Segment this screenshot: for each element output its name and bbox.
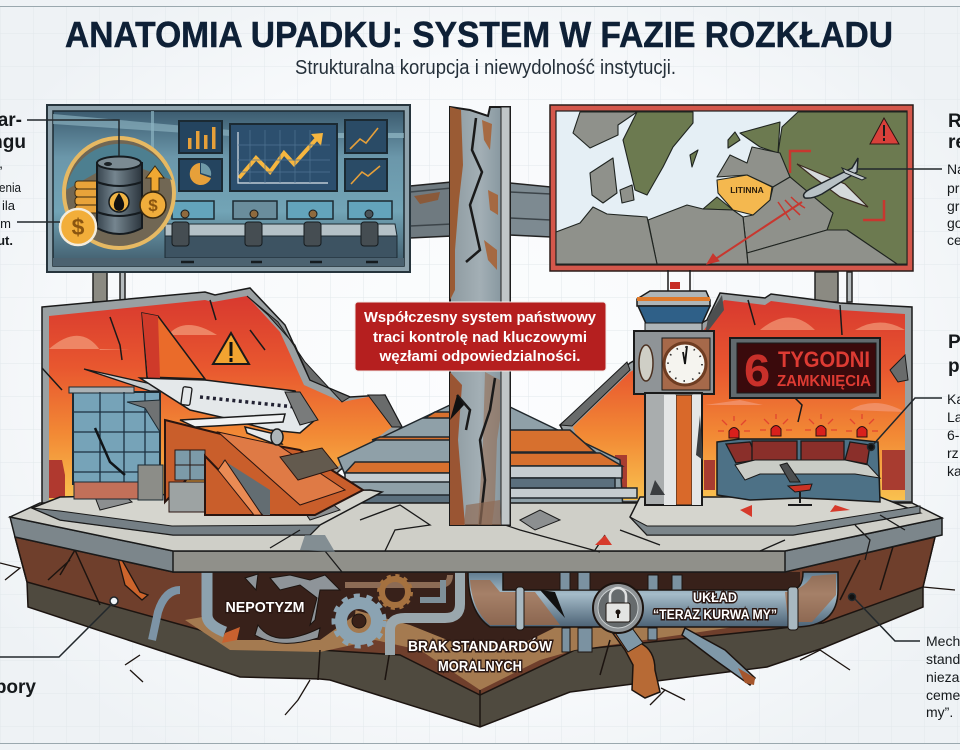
- crashed airplane: [84, 313, 318, 445]
- cropped text: right middle callout: [947, 332, 960, 479]
- cropped text: right bottom callout: ceme: [926, 687, 960, 703]
- label: lack of moral standards: BRAK STANDARDÓW: [408, 637, 553, 655]
- callout: red statement box: traci kontrolę nad kluczowymi: [373, 329, 587, 346]
- label: lack of moral standards: [408, 637, 553, 675]
- callout: red statement box: Współczesny system państwowy: [364, 309, 597, 326]
- central terminal roof: [338, 405, 637, 510]
- operators at desks: [53, 201, 404, 266]
- board text: TYGODNI: [778, 347, 870, 372]
- seven segment digit 6: 6: [743, 348, 771, 401]
- collapsed orange building: [165, 420, 363, 515]
- icon: oil barrel with coins: [60, 138, 174, 248]
- cropped text: right middle callout: 6-: [947, 427, 960, 443]
- panel: right ruined wall with sky: [560, 293, 912, 502]
- cropped text: left top callout: [0, 110, 26, 248]
- label: nepotism: NEPOTYZM: [226, 599, 304, 616]
- subtitle: Strukturalna korupcja i niewydolność instytucji.: [295, 57, 676, 79]
- emergency control console: [717, 414, 880, 505]
- callout: red statement box: węzłami odpowiedzialności.: [378, 348, 580, 365]
- main corruption pipeline: [468, 572, 838, 698]
- concrete platform slab: [10, 490, 942, 572]
- foundation: soil and bedrock: [0, 537, 955, 727]
- cropped text: right bottom callout: stand: [926, 651, 960, 667]
- label: pipeline system: UKŁAD: [693, 590, 737, 605]
- icon: steel gear: [334, 596, 384, 646]
- panel: LED closure countdown board: [730, 338, 880, 401]
- cropped text: right bottom callout: Mech: [926, 633, 960, 649]
- label: pipeline system: [653, 590, 777, 622]
- cropped text: right bottom callout: nieza: [926, 669, 960, 685]
- central rusty column: [450, 107, 510, 525]
- title: ANATOMIA UPADKU: SYSTEM W FAZIE ROZKŁADU: [65, 14, 893, 55]
- map: Lithuania highlight: LITINNA: [730, 185, 764, 195]
- icon: oil barrel with coins: $: [148, 196, 158, 215]
- icon: bronze gear: [379, 576, 411, 608]
- label: lack of moral standards: MORALNYCH: [438, 658, 522, 675]
- board text: [777, 347, 871, 390]
- board text: ZAMKNIĘCIA: [777, 373, 871, 390]
- underground pipes and gears: [118, 518, 838, 698]
- panel: oil and finance control room billboard: [47, 105, 410, 272]
- cropped text: right middle callout: rz: [947, 445, 959, 461]
- label: pipeline system: “TERAZ KURWA MY”: [653, 607, 777, 622]
- icon: warning triangle on wall: [213, 333, 249, 364]
- cropped text: right bottom callout: [926, 633, 960, 720]
- icon: control tower with clock: [634, 270, 714, 505]
- icon: airplane on map: [797, 158, 868, 207]
- map: countries: [556, 112, 907, 264]
- chart screens: [179, 120, 387, 191]
- billboard support posts: [93, 272, 852, 302]
- panel: airspace map billboard: [550, 105, 913, 271]
- map: Lithuania highlight: [717, 175, 772, 215]
- panel: left ruined wall with sky: [42, 288, 402, 510]
- icon: warning triangle: [870, 118, 899, 144]
- cropped text: left top callout: m: [0, 216, 11, 231]
- underground labels: [226, 590, 777, 675]
- main growth arrow: [238, 130, 330, 183]
- cropped text: right top callout: [947, 111, 960, 248]
- cropped text: left top callout: ila: [2, 198, 16, 213]
- icon: padlock: [593, 583, 643, 633]
- small bar chart and pie: [188, 127, 216, 185]
- steel cross beams behind column: [410, 182, 551, 238]
- cropped text: right top callout: gr: [947, 198, 960, 214]
- callout lines: [0, 120, 942, 657]
- icon: oil barrel with coins: $: [72, 214, 85, 240]
- callout: red statement box: [355, 302, 606, 371]
- broken gear fragments: [245, 574, 340, 643]
- radar brackets and flight arrow: [707, 151, 884, 264]
- cropped text: right top callout: pr: [947, 180, 960, 196]
- cropped text: right bottom callout: my”.: [926, 704, 953, 720]
- damaged glass terminal building: [69, 387, 163, 500]
